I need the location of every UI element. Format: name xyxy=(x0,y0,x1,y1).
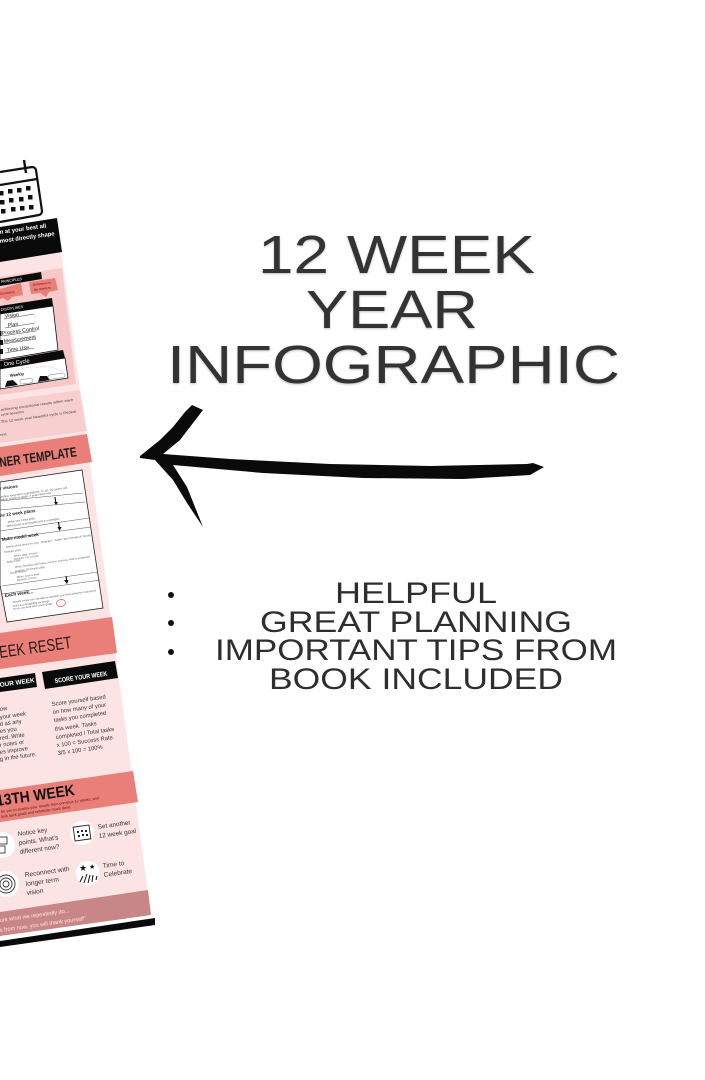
arrows between steps xyxy=(54,497,68,584)
item: time to celebrate xyxy=(76,860,133,885)
step: model week: Duration: 3 hours xyxy=(17,575,38,582)
disciplines list: Process Control xyxy=(1,326,40,337)
text block: review: es improve xyxy=(0,746,28,756)
text block: score: x 100 = Success Rate. xyxy=(56,735,115,749)
footer quote band xyxy=(0,890,151,936)
page background: light pink xyxy=(0,250,151,936)
title: YEAR xyxy=(306,280,478,340)
disciplines list: Time Use xyxy=(6,345,30,354)
item: reconnect with vision: longer term xyxy=(25,876,60,888)
item: time to celebrate: Celebrate xyxy=(103,868,133,879)
title: 12 WEEK xyxy=(258,225,535,285)
quote band: black xyxy=(0,218,62,262)
step: plans: Define your 3 main goals xyxy=(8,516,35,524)
panel: summary text: achieving exceptional results within each xyxy=(1,398,73,412)
item: time to celebrate: ★ xyxy=(89,863,95,871)
panel: summary text: The 12 week year beautiful cycle is Repeat xyxy=(1,409,76,424)
bullet list: BOOK INCLUDED xyxy=(269,663,563,696)
step: each week: Weekly review your calculations and plan your week using the model week xyxy=(13,588,97,604)
coral callouts: Greatness in xyxy=(33,280,51,287)
step: visions: Define long-term aspirations: 5, 10, 20 years out xyxy=(0,486,68,499)
disciplines list: Vision xyxy=(4,312,20,320)
step: model week: Duration: 3 or 4 hours xyxy=(14,553,40,561)
item: time to celebrate: Time to xyxy=(102,860,125,870)
quote band: black: n at your best all xyxy=(0,223,47,236)
disciplines list: Plan xyxy=(7,322,19,329)
item: set another goal: Set another xyxy=(97,819,132,831)
coral callouts: the moment xyxy=(34,286,51,292)
item: set another goal: 12 week goal xyxy=(98,828,137,840)
step: model week: Duration: 30 minutes daily xyxy=(15,565,46,573)
text block: score xyxy=(51,694,115,757)
item: time to celebrate: ★ xyxy=(79,864,87,874)
text block: review: r notes or xyxy=(0,740,25,749)
disciplines list: Measurement xyxy=(3,334,37,345)
bullet list: IMPORTANT TIPS FROM xyxy=(215,634,617,667)
step: plans: Define tactics to accomplish each in a week/plan xyxy=(7,517,60,528)
text block: review xyxy=(0,706,37,763)
quote band: black: most directly shape xyxy=(0,231,56,245)
panel: summary text: cycle becomes xyxy=(1,410,24,417)
text block: score: this week. Tasks xyxy=(54,721,97,733)
heading: planner template band: NER TEMPLATE xyxy=(0,444,78,470)
step: model week: Buffer block xyxy=(7,558,21,564)
item: notice key points: points. What's xyxy=(18,834,59,847)
heading: week reset band xyxy=(0,617,117,669)
panel: template sheet xyxy=(0,470,103,622)
tab: review your week: OUR WEEK xyxy=(0,677,35,689)
tab: score your week: SCORE YOUR WEEK xyxy=(54,671,108,685)
step: model week: Strategic block xyxy=(4,548,22,554)
step: model week: Define block times for your "strategic", "buffer" and "breakout" blocks xyxy=(6,533,92,549)
coral callouts: Greatness xyxy=(0,290,15,296)
heading: planner template band xyxy=(0,434,92,476)
text block: score: 3/5 x 100 = 100% xyxy=(57,745,103,757)
heading: week reset band: EEK RESET xyxy=(0,633,73,662)
item: reconnect with vision xyxy=(0,866,70,897)
cycle panel xyxy=(0,350,68,389)
footer quote band: ure what we repeatedly do... xyxy=(0,908,70,924)
coral callouts xyxy=(0,278,58,301)
item: notice key points: Notice key xyxy=(17,827,49,838)
text block: score: on how many of your xyxy=(52,703,107,716)
step: each week: Score yourself and reach goals xyxy=(13,601,53,611)
text block: score: tasks you completed xyxy=(53,711,107,724)
heading: 13th week band: look back goals and celebrate much done. xyxy=(1,805,72,819)
heading: 13th week band xyxy=(0,771,138,822)
bullet list: HELPFUL xyxy=(335,577,497,610)
step: model week xyxy=(1,532,92,582)
step: model week: Group session xyxy=(10,569,27,575)
title xyxy=(167,225,620,395)
text block: score: completed / Total tasks xyxy=(55,727,115,741)
tab: review your week xyxy=(0,673,37,692)
tab: score your week xyxy=(42,661,118,689)
text block: review: your week xyxy=(0,711,27,721)
step: visions xyxy=(0,483,68,502)
footer quote band: s from now, you will thank yourself" xyxy=(0,916,86,934)
item: set another goal xyxy=(70,819,137,845)
text block: review: d as any xyxy=(0,719,22,728)
step: each week: Each week... xyxy=(4,589,34,599)
bullet markers xyxy=(168,592,174,655)
step: model week: When: once a week xyxy=(17,572,40,579)
bottom black strip xyxy=(0,918,155,947)
step: model week: Make model week xyxy=(1,532,39,542)
heading: 13th week band: for you to assess your results from previous 12 weeks, and xyxy=(1,796,99,814)
disciplines list: DISCIPLINES xyxy=(1,305,24,312)
step: each week: Hold accountability meetings xyxy=(13,599,50,608)
item: reconnect with vision: vision xyxy=(26,888,44,897)
text block: review: g in the future. xyxy=(0,752,37,763)
item: notice key points xyxy=(0,827,60,858)
panel: pink principles block xyxy=(0,268,76,395)
arrow: brush arrow pointing left xyxy=(140,405,544,527)
step: model week: When: daily, 2 hours xyxy=(14,551,38,558)
step: visions: r visions xyxy=(0,483,19,491)
panel: summary text xyxy=(0,390,87,443)
bullet list xyxy=(168,577,617,696)
item: notice key points: different now? xyxy=(19,843,60,856)
cycle panel: Weekly xyxy=(9,371,25,378)
panel: tilted infographic preview xyxy=(0,160,155,947)
bullet list: GREAT PLANNING xyxy=(260,606,572,639)
step: model week: When: Monday and Friday, check-in morning, what is unplanned xyxy=(15,554,91,569)
title: INFOGRAPHIC xyxy=(167,335,620,395)
text block: score: Score yourself based xyxy=(51,694,106,708)
step: plans xyxy=(0,508,60,528)
heading tab: PRINCIPLES xyxy=(1,277,23,284)
text block: review: red. Write xyxy=(0,733,25,742)
cycle panel: One Cycle xyxy=(3,358,30,368)
step: visions: Define mid-term goals: 3 years from now xyxy=(0,491,53,502)
step: plans: he 12 week plans xyxy=(0,508,36,518)
item: reconnect with vision: Reconnect with xyxy=(24,866,70,879)
icon: calendar xyxy=(0,160,42,222)
disciplines list xyxy=(0,298,58,360)
step: each week xyxy=(4,588,97,611)
